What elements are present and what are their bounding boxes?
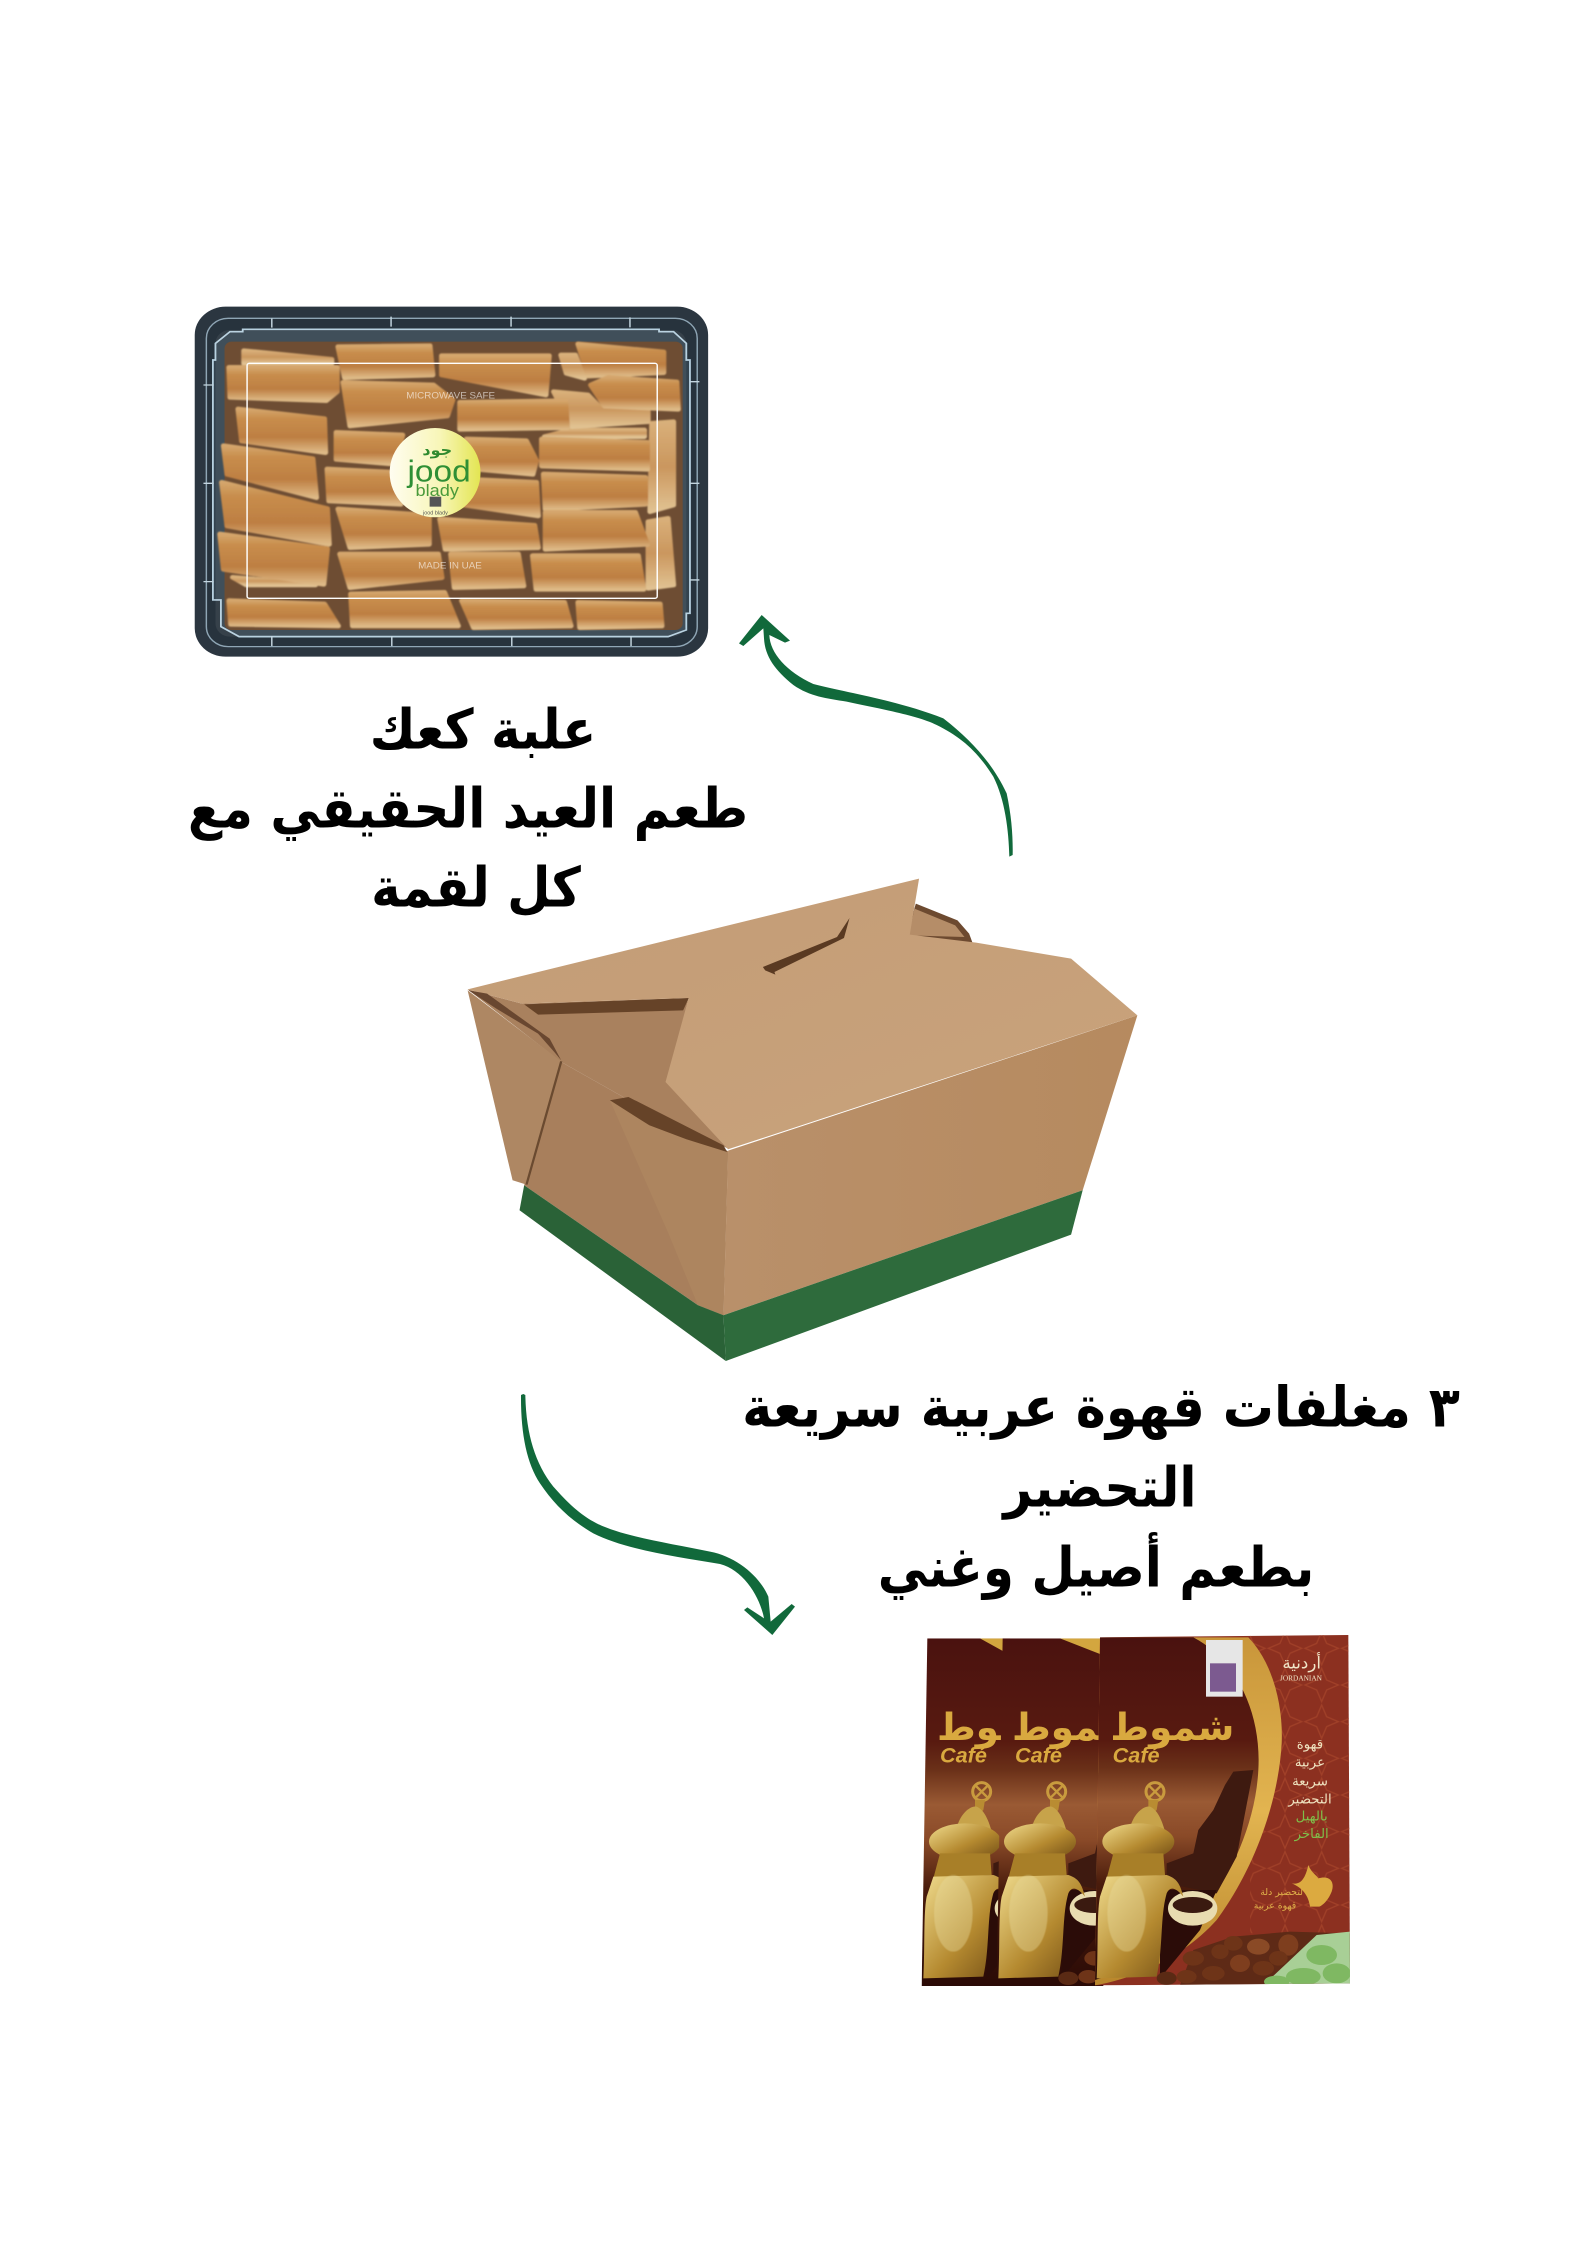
sachet front: سريعة — [1292, 1775, 1328, 1790]
sachet middle — [998, 1638, 1104, 1986]
arrow: up to cookie tray — [739, 615, 1013, 857]
box green band — [520, 1185, 1083, 1361]
caption: coffee sachets: بطعم أصيل وغني — [878, 1536, 1314, 1600]
sachet front: لتحضير دلة — [1260, 1887, 1303, 1898]
tray base — [195, 307, 708, 657]
sachet front: شموط — [1110, 1705, 1234, 1749]
product photo: tray of ka'ak cookies — [194, 306, 708, 657]
caption: coffee sachets: ٣ مغلفات قهوة عربية سريعة — [742, 1376, 1460, 1441]
box side panels — [468, 990, 728, 1315]
sachet front: عربية — [1295, 1756, 1325, 1771]
sachet middle: Café — [1015, 1743, 1062, 1768]
sachet front: Café — [1113, 1743, 1160, 1768]
sachet left: شموط — [937, 1705, 1061, 1749]
product photo: kraft box with green base — [468, 878, 1138, 1361]
caption: coffee sachets: التحضير — [1003, 1456, 1197, 1520]
sticker: jood blady logo: jood — [406, 454, 471, 488]
sachet front: الفاخر — [1294, 1827, 1329, 1842]
sachet left: Café — [940, 1743, 987, 1768]
sachet front: بالهيل — [1296, 1810, 1328, 1825]
sachet front: قهوة عربية — [1254, 1900, 1296, 1911]
sticker: jood blady logo: jood blady — [422, 511, 448, 517]
caption: cookie box: علبة كعك — [370, 698, 596, 762]
sachet front: أردنية — [1282, 1651, 1321, 1672]
sticker: jood blady logo — [390, 428, 481, 517]
sachet front — [1093, 1633, 1353, 1988]
caption: cookie box: طعم العيد الحقيقي مع — [188, 777, 748, 841]
sachet front: قهوة — [1297, 1737, 1323, 1752]
box front panel — [723, 1015, 1137, 1315]
sachet front: JORDANIAN — [1280, 1674, 1323, 1683]
sticker: jood blady logo: جود — [422, 442, 452, 459]
transparent lid with embossed frame: MICROWAVE SAFE — [406, 390, 495, 400]
arrow: down to coffee sachets — [520, 1394, 795, 1635]
caption: cookie box: كل لقمة — [371, 856, 581, 920]
product photo: three coffee sachets — [922, 1635, 1350, 1986]
sticker: jood blady logo: blady — [416, 481, 459, 500]
cookies — [220, 344, 678, 628]
box top flaps — [468, 879, 1137, 1149]
sachet left — [922, 1638, 1010, 1986]
sachet middle: شموط — [1012, 1705, 1136, 1749]
transparent lid with embossed frame: MADE IN UAE — [418, 560, 482, 570]
caption: cookie box — [188, 698, 748, 920]
sachet front: التحضير — [1287, 1792, 1332, 1807]
caption: coffee sachets — [742, 1376, 1460, 1600]
transparent lid with embossed frame — [215, 330, 686, 637]
